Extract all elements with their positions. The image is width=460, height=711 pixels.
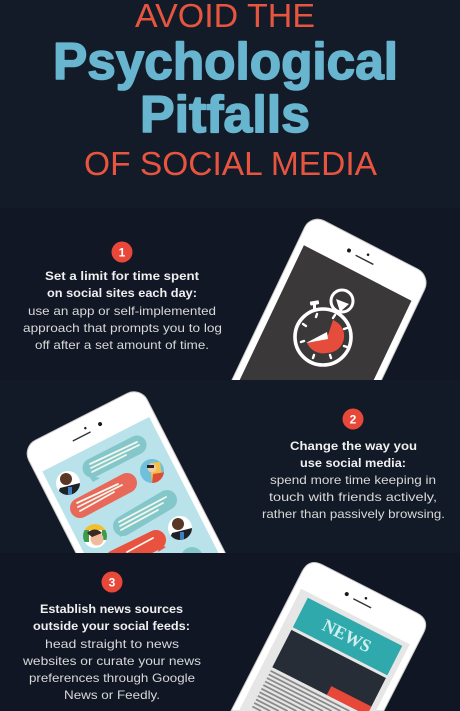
red tag (327, 686, 371, 711)
text block: step 2: use social media: (300, 456, 406, 470)
panel: step 3 text (22, 572, 201, 702)
article lines (252, 671, 349, 711)
panel: step 2 text (262, 408, 445, 521)
text block: step 3 (22, 602, 201, 702)
icon: number 1 (112, 242, 132, 262)
phone: stopwatch (232, 218, 427, 380)
title: Psychological (53, 33, 398, 91)
text block: step 1: Set a limit for time spent (45, 269, 199, 283)
phone: chat (26, 391, 226, 553)
text block: step 3: preferences through Google (29, 671, 195, 685)
icon: number 1: 1 (119, 246, 126, 260)
icon: number 2: 2 (350, 412, 357, 426)
avatars (56, 459, 194, 548)
text block: step 2: rather than passively browsing. (262, 507, 445, 521)
text block: step 3: websites or curate your news (22, 654, 201, 668)
title (53, 0, 398, 182)
icon: number 3 (102, 572, 122, 592)
text block: step 3: outside your social feeds: (33, 619, 190, 633)
text block: step 2: Change the way you (290, 439, 417, 453)
title: OF SOCIAL MEDIA (84, 145, 377, 182)
panel: step 1 text (23, 242, 222, 352)
text block: step 1: use an app or self-implemented (28, 304, 216, 318)
text block: step 3: News or Feedly. (64, 688, 160, 702)
text block: step 1: on social sites each day: (47, 286, 197, 300)
text block: step 1 (23, 269, 222, 352)
news image block (272, 630, 386, 711)
icon: stopwatch (295, 290, 353, 365)
chat bubbles (77, 442, 203, 569)
title: Pitfalls (140, 86, 310, 144)
text block: step 3: Establish news sources (40, 602, 183, 616)
news banner: NEWS (319, 615, 375, 656)
text block: step 2: touch with friends actively, (269, 490, 437, 504)
phone: news (231, 563, 426, 711)
text block: step 3: head straight to news (45, 637, 179, 651)
text block: step 1: off after a set amount of time. (35, 338, 209, 352)
icon: number 2 (342, 408, 364, 430)
text block: step 1: approach that prompts you to log (23, 321, 222, 335)
icon: number 3: 3 (109, 576, 116, 590)
text block: step 2: spend more time keeping in (270, 473, 436, 487)
text block: step 2 (262, 439, 445, 521)
